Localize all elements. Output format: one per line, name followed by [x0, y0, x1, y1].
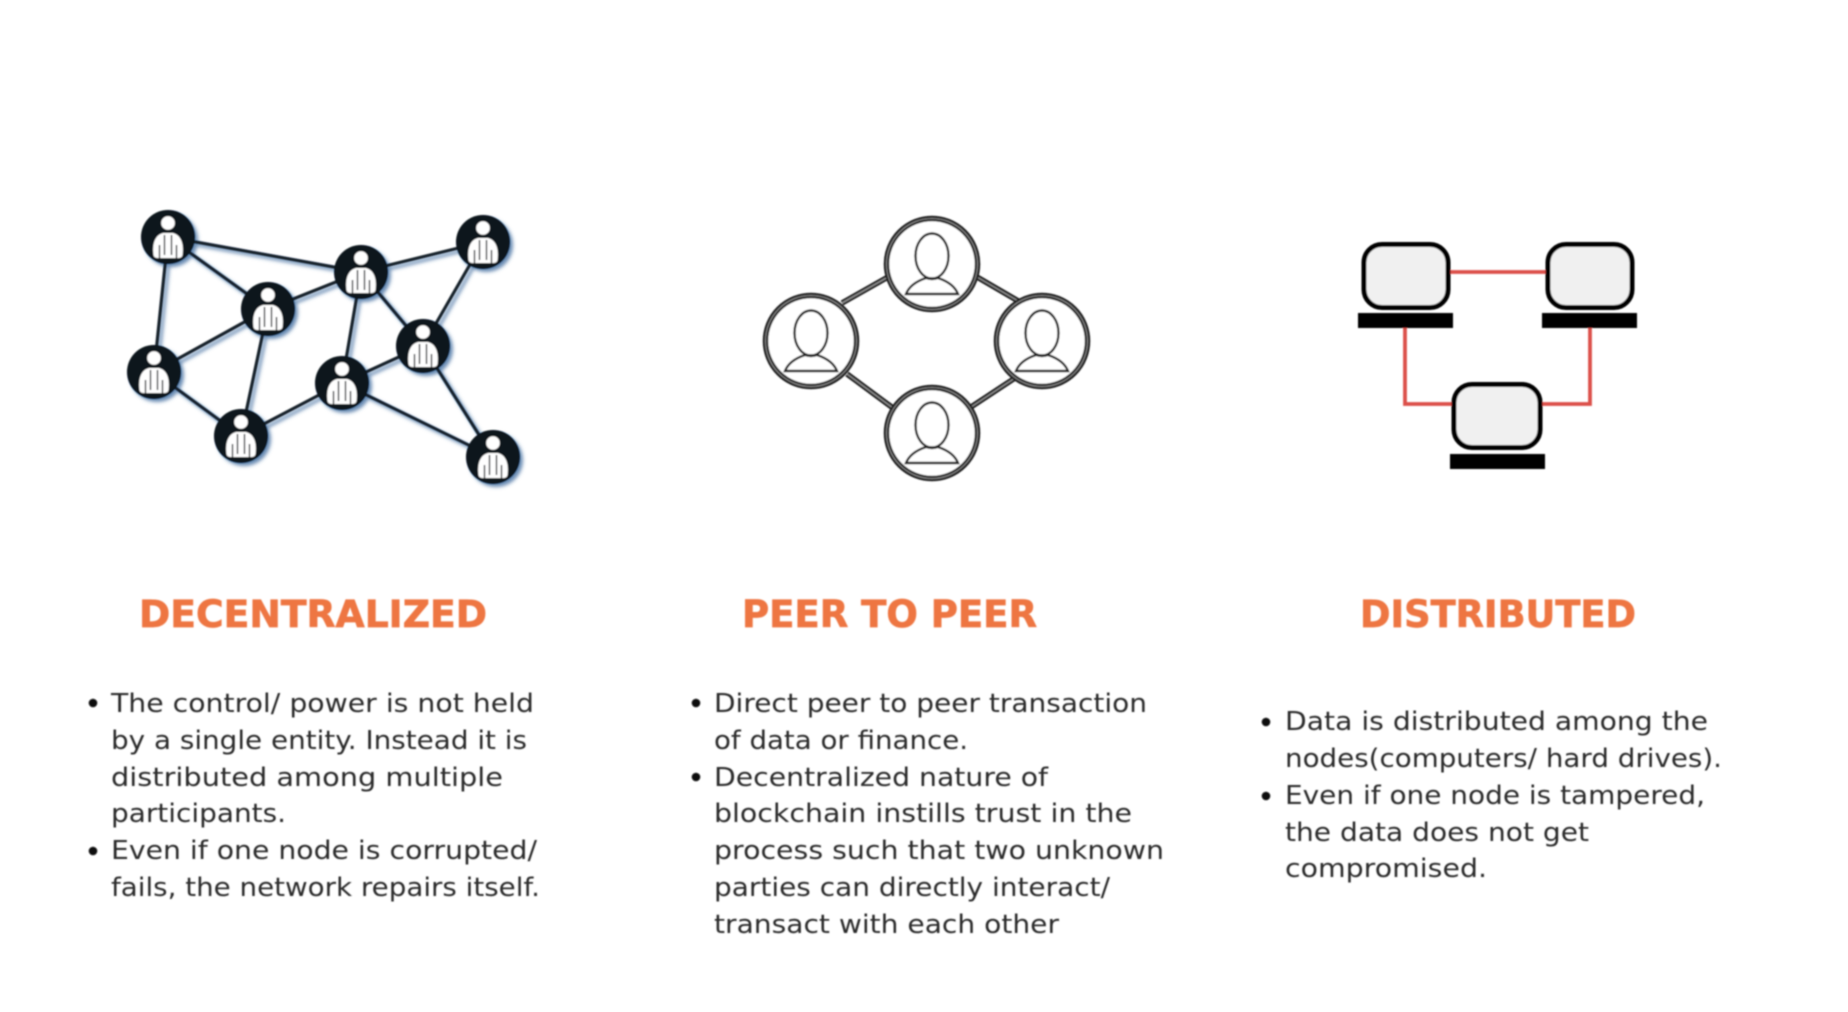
heading: decentralized: DECENTRALIZED [139, 593, 487, 636]
text block: peer to peer bullets: parties can directly interact/ [714, 873, 1110, 903]
peer nodes [766, 218, 1088, 478]
icon: distributed computers [1358, 244, 1637, 469]
text block: decentralized bullets: distributed among multiple [111, 763, 503, 793]
text block: distributed bullets: Data is distributed among the [1285, 707, 1708, 737]
heading: distributed: DISTRIBUTED [1360, 593, 1636, 636]
computer one [1358, 244, 1453, 328]
computer two [1542, 244, 1637, 328]
icon: peer to peer ring [766, 218, 1088, 478]
text block: peer to peer bullets: of data or finance. [714, 726, 968, 756]
icon: decentralized network [127, 210, 520, 484]
text block: peer to peer bullets: transact with each other [714, 910, 1059, 940]
text block: decentralized bullets: Even if one node is corrupted/ [111, 836, 537, 866]
text block: distributed bullets: nodes(computers/ hard drives). [1285, 744, 1722, 774]
text block: peer to peer bullets: process such that two unknown [714, 836, 1164, 866]
text block: decentralized bullets: fails, the network repairs itself. [111, 873, 540, 903]
text block: peer to peer bullets: Decentralized nature of [714, 763, 1049, 793]
heading: peer to peer: PEER TO PEER [742, 593, 1037, 636]
computer three [1450, 384, 1545, 469]
text block: peer to peer bullets: Direct peer to peer transaction [714, 689, 1147, 719]
network nodes [127, 210, 520, 484]
network connections [154, 237, 493, 457]
peer links [842, 277, 1020, 408]
text block: peer to peer bullets: blockchain instills trust in the [714, 799, 1132, 829]
text block: decentralized bullets: participants. [111, 799, 286, 829]
text block: distributed bullets [1262, 707, 1722, 884]
text block: decentralized bullets: by a single entity. Instead it is [111, 726, 527, 756]
text block: decentralized bullets [89, 689, 540, 903]
text block: distributed bullets: compromised. [1285, 854, 1487, 884]
red connection lines [1405, 272, 1590, 404]
text block: distributed bullets: Even if one node is tampered, [1285, 781, 1705, 811]
text block: distributed bullets: the data does not get [1285, 818, 1589, 848]
text block: decentralized bullets: The control/ power is not held [110, 689, 534, 719]
text block: peer to peer bullets [692, 689, 1164, 940]
